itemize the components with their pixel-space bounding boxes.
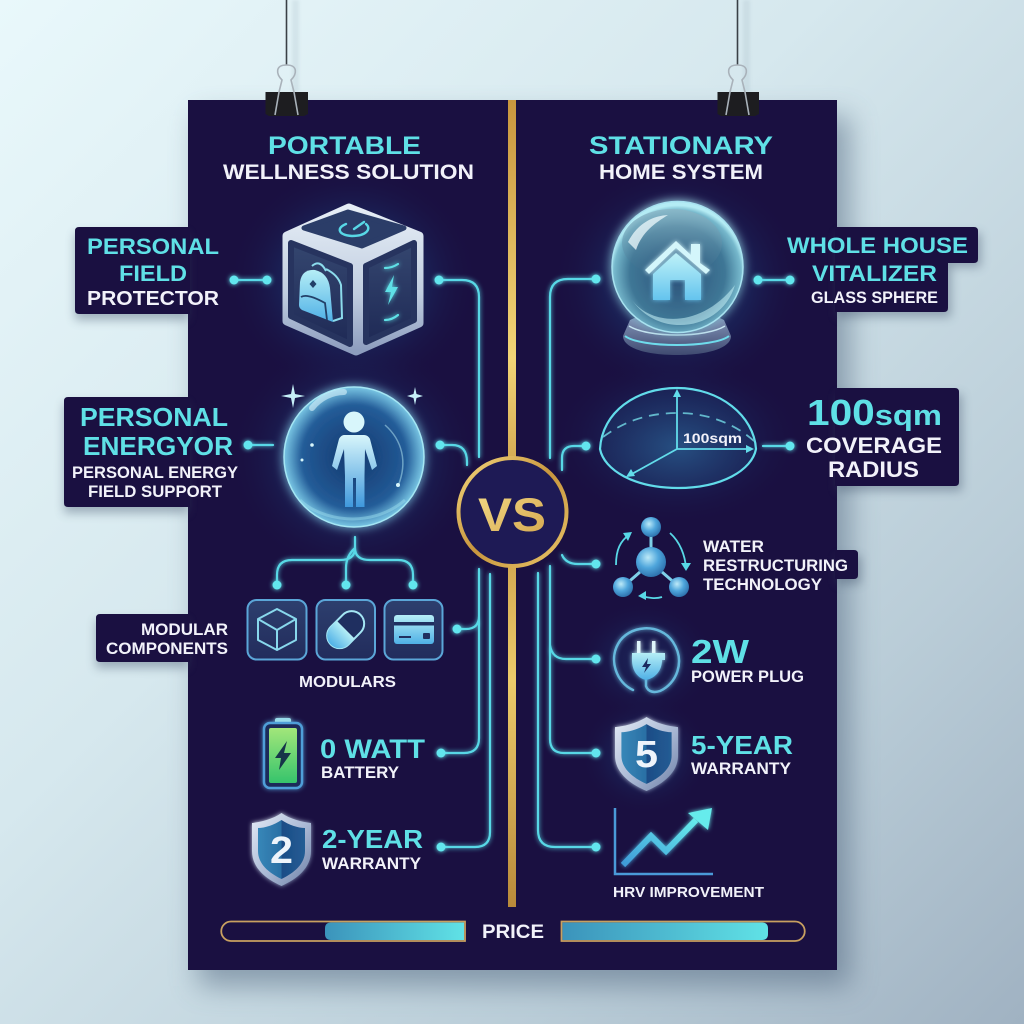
backpack glyph xyxy=(299,263,342,322)
5-year warranty text: 5-YEAR xyxy=(691,730,793,760)
2-year warranty text: 2-YEAR xyxy=(322,824,423,854)
connector: dome to label xyxy=(763,442,794,450)
callout: 100sqm coverage radius: RADIUS xyxy=(828,457,919,482)
house glyph xyxy=(645,241,710,300)
right heading: HOME SYSTEM xyxy=(599,161,763,184)
callout: personal field protector: PROTECTOR xyxy=(87,288,220,310)
icon: device cube xyxy=(287,208,419,351)
icon: power plug xyxy=(614,628,679,692)
callout: personal energyor: ENERGYOR xyxy=(83,431,233,461)
tree connector to modulars xyxy=(272,537,418,590)
0 watt battery text xyxy=(320,734,426,782)
icon: coverage dome xyxy=(600,388,756,488)
label shadows xyxy=(64,233,981,668)
callout: whole house vitalizer: WHOLE HOUSE xyxy=(787,233,968,258)
icon: 5-year shield: 5 xyxy=(635,734,658,776)
icon group: modular tiles xyxy=(248,600,442,660)
left connector lines xyxy=(439,280,490,847)
HRV caption: HRV IMPROVEMENT xyxy=(613,884,764,901)
poster shadow xyxy=(198,116,850,986)
right clip xyxy=(718,0,759,116)
callout: personal energyor: PERSONAL xyxy=(80,402,228,432)
sphere base xyxy=(623,312,731,355)
left heading: PORTABLE xyxy=(268,132,421,160)
tile: card xyxy=(384,600,442,660)
left heading: WELLNESS SOLUTION xyxy=(223,161,474,184)
VS badge xyxy=(458,458,566,566)
2-year warranty text xyxy=(322,824,423,873)
icon: home in glass sphere xyxy=(612,202,743,355)
icon: battery xyxy=(264,718,302,788)
bolt glyph xyxy=(385,264,398,320)
2W power plug text: 2W xyxy=(691,633,750,670)
poster panel xyxy=(188,100,837,970)
modulars caption: MODULARS xyxy=(299,674,396,691)
icon: 5-year shield xyxy=(615,717,678,791)
price label: PRICE xyxy=(482,922,544,943)
icon: coverage dome: 100sqm xyxy=(683,430,742,446)
right heading: STATIONARY xyxy=(589,132,773,160)
left connector dots xyxy=(434,276,462,852)
callout: water restructuring technology: RESTRUCTURING xyxy=(703,556,848,575)
icon: 2-year shield: 2 xyxy=(270,830,293,872)
left price bar xyxy=(221,922,465,941)
left heading xyxy=(223,132,474,184)
callout: water restructuring technology: WATER xyxy=(703,537,764,556)
connector: protector to cube xyxy=(230,276,272,284)
connector: energyor to bubble xyxy=(244,440,273,450)
right connector lines xyxy=(538,279,596,847)
power glyph xyxy=(340,222,368,236)
callout: 100sqm coverage radius xyxy=(806,388,959,486)
tile: cube xyxy=(248,600,306,660)
gold center divider xyxy=(508,100,516,907)
callout: personal energyor: FIELD SUPPORT xyxy=(88,483,222,501)
callout: whole house vitalizer: VITALIZER xyxy=(812,261,937,286)
right price bar xyxy=(562,922,805,941)
callout: personal energyor: PERSONAL ENERGY xyxy=(72,464,238,482)
2-year warranty text: WARRANTY xyxy=(322,855,421,873)
rotation arrows xyxy=(616,533,686,598)
callout: whole house vitalizer: GLASS SPHERE xyxy=(811,288,938,307)
icon: 2-year shield xyxy=(252,813,311,886)
callout: personal field protector xyxy=(75,227,220,314)
callout: modular components: COMPONENTS xyxy=(106,639,228,658)
2W power plug text xyxy=(691,633,804,686)
left clip xyxy=(266,0,308,116)
callout: modular components xyxy=(96,614,228,662)
callout: modular components: MODULAR xyxy=(141,620,228,639)
0 watt battery text: 0 WATT xyxy=(320,734,426,764)
5-year warranty text: WARRANTY xyxy=(691,760,791,778)
callout: water restructuring technology xyxy=(703,537,858,594)
price comparison xyxy=(221,922,805,943)
icon: water molecule xyxy=(613,517,691,600)
icon: person in energy bubble xyxy=(281,384,424,527)
5-year warranty text xyxy=(691,730,793,778)
connector: sphere to label xyxy=(754,276,794,284)
right heading xyxy=(589,132,773,184)
right connector dots xyxy=(582,274,600,852)
2W power plug text: POWER PLUG xyxy=(691,668,804,686)
tile: capsule xyxy=(316,600,375,660)
callout: personal energyor xyxy=(64,397,238,507)
string shadows xyxy=(292,0,750,92)
VS badge: VS xyxy=(478,488,546,541)
callout: whole house vitalizer xyxy=(787,227,978,312)
chart: HRV improvement arrow xyxy=(615,808,713,874)
callout: 100sqm coverage radius: 100 sqm xyxy=(807,392,942,433)
callout: personal field protector: FIELD xyxy=(119,261,187,286)
callout: personal field protector: PERSONAL xyxy=(87,234,219,259)
0 watt battery text: BATTERY xyxy=(321,764,399,782)
callout: water restructuring technology: TECHNOLOGY xyxy=(703,575,823,594)
hanging strings and binder clips xyxy=(266,0,759,116)
callout: 100sqm coverage radius: COVERAGE xyxy=(806,433,942,458)
